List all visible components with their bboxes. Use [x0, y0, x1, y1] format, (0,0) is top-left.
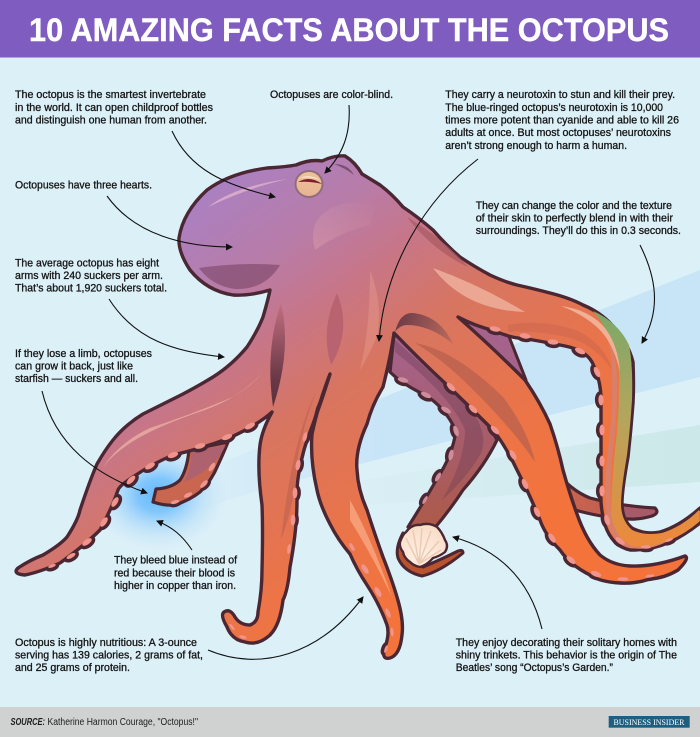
fact: trinkets: Beatles’ song “Octopus’s Garden.” [456, 662, 613, 674]
fact: nutritious: serving has 139 calories, 2 grams of fat, [15, 650, 203, 662]
fact: trinkets [456, 637, 677, 674]
fact: neurotoxin: They carry a neurotoxin to stun and kill their prey. [445, 89, 675, 101]
fact: neurotoxin: times more potent than cyanide and able to kill 26 [445, 114, 679, 126]
fact: nutritious [15, 637, 203, 674]
fact: bleed blue: red because their blood is [114, 568, 235, 580]
fact: suckers: The average octopus has eight [15, 258, 159, 270]
source line: SOURCE: [10, 717, 45, 728]
back arm holding shell [390, 335, 497, 530]
fact: color and texture: surroundings. They’ll do this in 0.3 seconds. [476, 225, 681, 237]
fact: smartest invertebrate [15, 89, 213, 126]
fact: bleed blue: They bleed blue instead of [114, 555, 238, 567]
small back arm [153, 442, 228, 505]
fact: neurotoxin: aren’t strong enough to harm a human. [445, 140, 627, 152]
fact: regrow limb: can grow it back, just like [15, 360, 133, 372]
fold marks on body [103, 217, 535, 597]
fact: suckers: That’s about 1,920 suckers total. [15, 282, 167, 294]
title banner [0, 0, 700, 58]
fact: neurotoxin: adults at once. But most octopuses’ neurotoxins [445, 127, 671, 139]
shell [400, 524, 447, 567]
sucker bumps behind body [48, 325, 674, 653]
fact: smartest invertebrate: in the world. It can open childproof bottles [15, 102, 213, 114]
fact: smartest invertebrate: The octopus is the smartest invertebrate [15, 89, 206, 101]
fact: three hearts: Octopuses have three hearts. [15, 180, 152, 192]
fact: regrow limb: If they lose a limb, octopuses [15, 348, 152, 360]
business insider logo: BUSINESS INSIDER [614, 718, 685, 727]
source line: Katherine Harmon Courage, "Octopus!" [48, 717, 198, 728]
fact: regrow limb: starfish — suckers and all. [15, 373, 138, 385]
fact: bleed blue: higher in copper than iron. [114, 580, 236, 592]
suckers [48, 325, 674, 653]
footer bar [0, 707, 700, 737]
fact: smartest invertebrate: and distinguish one human from another. [15, 114, 207, 126]
title banner: 10 AMAZING FACTS ABOUT THE OCTOPUS [29, 12, 669, 48]
back arm wedge [462, 318, 526, 380]
fact: suckers [15, 258, 167, 294]
fact: trinkets: They enjoy decorating their solitary homes with [456, 637, 677, 649]
fact: nutritious: and 25 grams of protein. [15, 662, 130, 674]
back arm right [555, 470, 657, 519]
fact: neurotoxin [445, 89, 679, 152]
body and arms [16, 156, 700, 658]
fact: color-blind: Octopuses are color-blind. [270, 89, 393, 101]
fact: regrow limb [15, 348, 152, 385]
color-change strip on arm [508, 306, 699, 549]
fact: color and texture: of their skin to perfectly blend in with their [476, 212, 673, 224]
fact: color and texture [476, 200, 681, 237]
fact: suckers: arms with 240 suckers per arm. [15, 270, 163, 282]
eye [296, 171, 322, 197]
callout arrows [42, 105, 654, 659]
octopus illustration [16, 156, 700, 658]
fact: nutritious: Octopus is highly nutritious: A 3-ounce [15, 637, 197, 649]
fact: bleed blue [114, 555, 238, 592]
head shading and highlights [199, 164, 375, 289]
fact: neurotoxin: The blue-ringed octopus’s neurotoxin is 10,000 [445, 102, 663, 114]
business insider logo [609, 716, 690, 728]
hook under shell [397, 533, 463, 576]
fact: color and texture: They can change the color and the texture [476, 200, 672, 212]
fact: trinkets: shiny trinkets. This behavior is the origin of The [456, 650, 677, 662]
